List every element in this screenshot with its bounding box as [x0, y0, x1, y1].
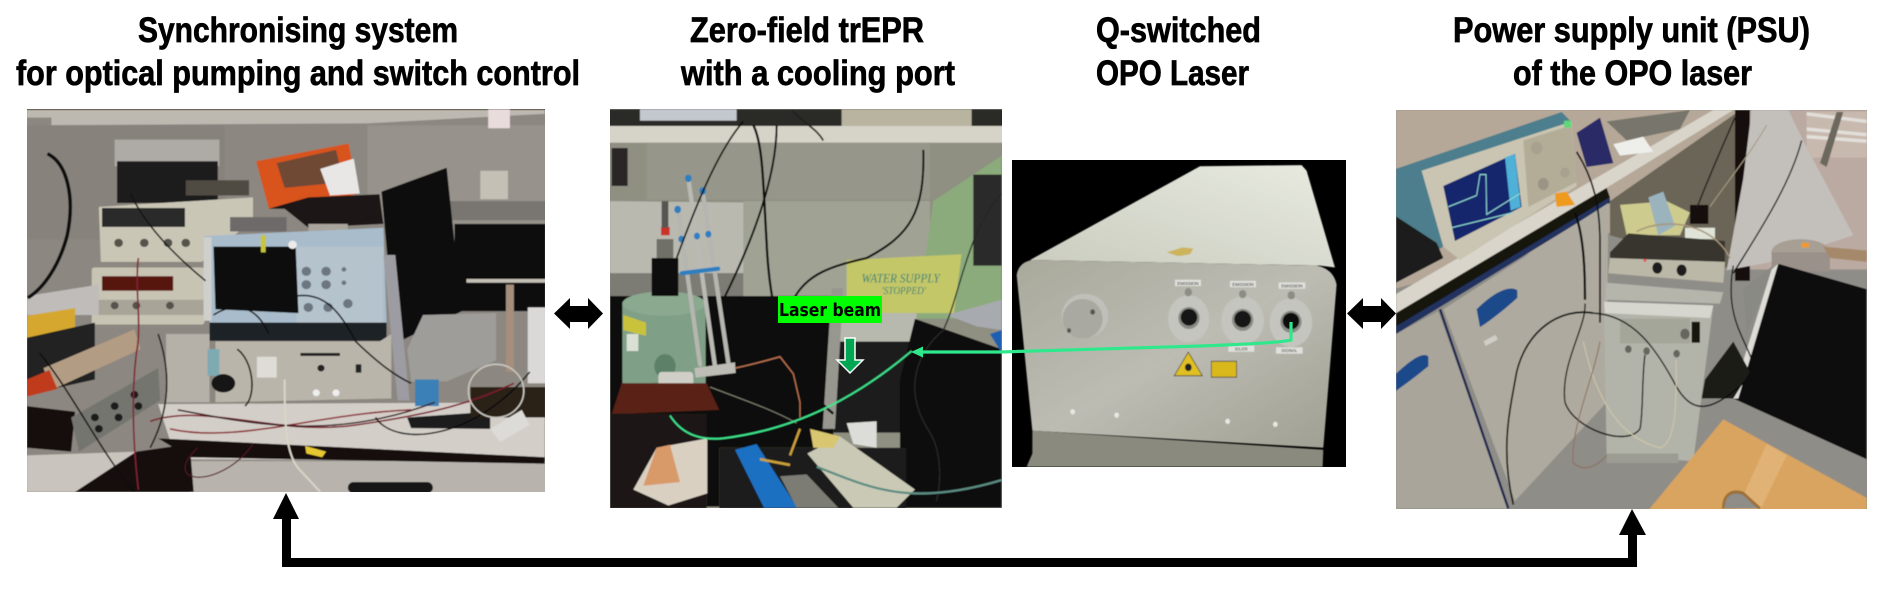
yellow cloth and bottle [1620, 192, 1715, 239]
heading: power supply unit: Power supply unit (PSU) [1453, 11, 1810, 50]
laser top face [1030, 165, 1335, 268]
counter top [1396, 110, 1733, 315]
emission labels: EMISSION [1281, 283, 1303, 289]
power strip and small parts [305, 380, 546, 457]
heading: power supply unit [1453, 11, 1810, 93]
laser base [1027, 431, 1323, 467]
laser front face [1017, 260, 1337, 448]
heading: Q-switched OPO laser [1096, 11, 1261, 93]
heading: synchronising system: for optical pumping and switch control [16, 54, 580, 93]
emission labels [1175, 280, 1305, 354]
arrow: PSU to synchronising system [273, 493, 1646, 567]
support rods [674, 175, 728, 366]
heading: synchronising system: Synchronising system [138, 11, 458, 50]
emission ports [1168, 288, 1312, 347]
aluminium rail [383, 255, 410, 400]
heading: zero-field trEPR: Zero-field trEPR [690, 11, 924, 50]
label: laser beam [778, 296, 882, 323]
heading: Q-switched OPO laser: Q-switched [1096, 11, 1261, 50]
sticky note: water supply stopped [847, 254, 962, 313]
black board [1733, 264, 1867, 459]
oscilloscope [204, 228, 387, 341]
clear box and black instrument [115, 140, 249, 203]
PSU tower [1604, 302, 1713, 463]
benchtop power supplies [92, 197, 253, 324]
shelf [607, 126, 1007, 143]
label: laser beam: Laser beam [779, 300, 881, 321]
arrow: double-headed, sync to trEPR [554, 298, 603, 329]
metal box [407, 313, 496, 381]
orange stool [1648, 419, 1867, 510]
resonator cylinder [621, 292, 707, 384]
panel: photo of zero-field trEPR [607, 106, 1007, 512]
top unit [1605, 233, 1725, 304]
cabinet doors [1396, 203, 1608, 509]
tangled cables [28, 154, 530, 492]
lower instrument [166, 334, 391, 402]
back black panels [381, 168, 546, 343]
emission labels: SIGNAL [1281, 348, 1298, 353]
emission labels: EMISSION [1232, 282, 1254, 287]
round port cover [1062, 294, 1108, 339]
probe head [652, 201, 678, 296]
left instruments [27, 285, 160, 452]
arrow: small green down arrow [837, 338, 863, 373]
bench top [27, 402, 546, 493]
optical table [719, 421, 915, 509]
laser warning labels [1174, 352, 1237, 377]
panel: photo of synchronising system [24, 106, 549, 497]
orange crate [256, 143, 383, 228]
arrow: laser beam from OPO to resonator [911, 322, 1291, 358]
cables [677, 110, 1002, 501]
base plate and stand [610, 383, 719, 509]
emission labels: EMISSION [1177, 281, 1199, 286]
waveguide coupling [658, 357, 800, 417]
aluminium post [823, 288, 843, 429]
sticky note: water supply stopped: WATER SUPPLY [862, 271, 941, 286]
cables [1507, 118, 1802, 505]
arrow: double-headed, laser to PSU [1347, 298, 1396, 329]
dark bench background [610, 175, 1002, 508]
under counter niche [1610, 110, 1750, 269]
heading: zero-field trEPR [680, 11, 955, 93]
heading: Q-switched OPO laser: OPO Laser [1096, 54, 1249, 93]
mounting holes [1070, 409, 1278, 427]
floor clutter [1702, 342, 1750, 398]
oscilloscope [1396, 112, 1577, 283]
lid and base of round chamber [1743, 239, 1867, 334]
emission labels: IDLER [1235, 346, 1248, 351]
heading: synchronising system [16, 11, 580, 93]
warning tag [1167, 247, 1193, 256]
green paper [917, 156, 1002, 319]
laser beam path [670, 351, 912, 439]
items on counter [1577, 110, 1690, 167]
heading: power supply unit: of the OPO laser [1513, 54, 1752, 93]
heading: zero-field trEPR: with a cooling port [680, 54, 955, 93]
panel: photo of OPO laser [1012, 160, 1346, 467]
panel: photo of power supply unit [1393, 108, 1870, 510]
light wall panels [610, 200, 930, 297]
sticky note: water supply stopped: 'STOPPED' [882, 286, 927, 297]
wall [1396, 110, 1870, 288]
foam panel [1727, 110, 1853, 270]
